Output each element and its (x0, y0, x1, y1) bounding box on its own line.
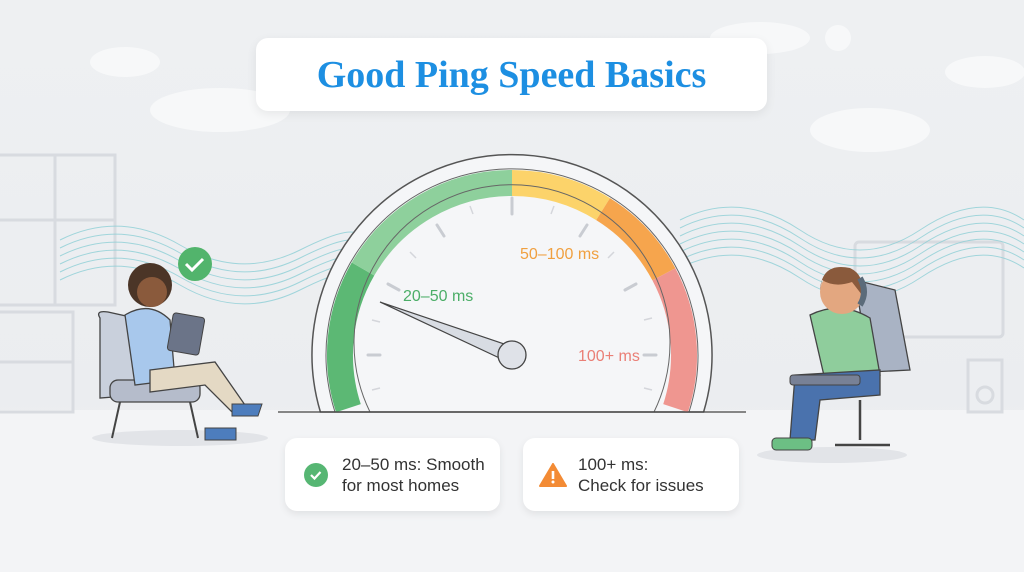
text: smooth (342, 454, 485, 494)
text: issues: Check for issues (578, 476, 704, 494)
gauge labels (403, 246, 640, 365)
gauge labels: 20–50 ms (403, 288, 473, 305)
card: issues (523, 438, 739, 511)
needle (380, 302, 526, 369)
gauge labels: 100+ ms (578, 348, 640, 365)
gauge labels: 50–100 ms (520, 246, 599, 263)
title (256, 38, 767, 111)
waves (60, 207, 1024, 304)
card: smooth (285, 438, 500, 511)
icon: check bubble (178, 247, 212, 281)
title: Good Ping Speed Basics (317, 54, 706, 96)
right person (757, 267, 910, 463)
icon: green check (304, 463, 328, 487)
text: issues: 100+ ms: (578, 454, 648, 474)
text: issues (578, 454, 704, 494)
icon: warning (539, 463, 567, 487)
text: smooth: for most homes (342, 476, 459, 494)
left person (92, 263, 268, 446)
text: smooth: 20–50 ms: Smooth (342, 454, 485, 474)
